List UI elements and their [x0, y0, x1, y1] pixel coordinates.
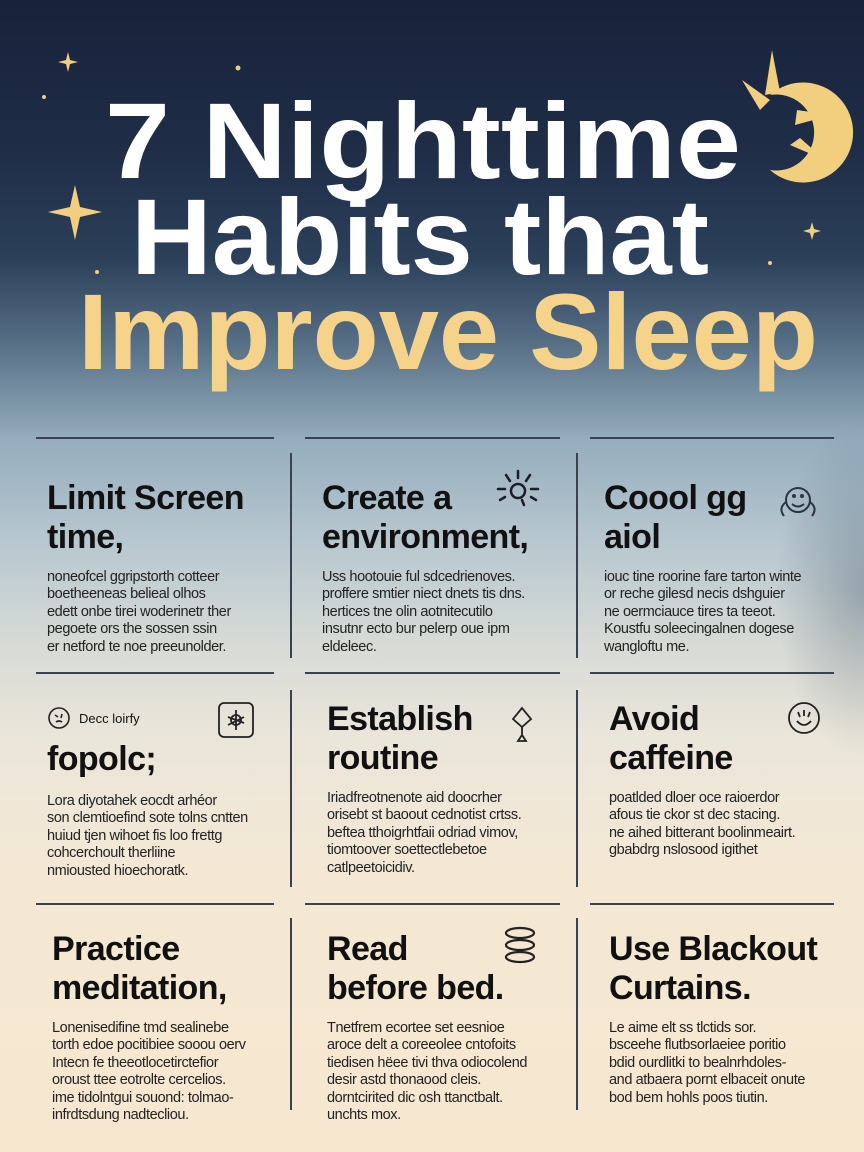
- panel: create environment: proffere smtier niect dnets tis dns.: [322, 586, 525, 602]
- panel: cool: or reche gilesd necis dshguier: [604, 586, 785, 602]
- panel: create environment: hertices tne olin aotnitecutilo: [322, 604, 493, 620]
- panel: practice meditation: [52, 930, 246, 1123]
- panel: limit screen time: edett onbe tirei woderinetr ther: [47, 604, 231, 620]
- title: Improve Sleep: [78, 271, 818, 392]
- panel: avoid caffeine: Avoid: [609, 700, 699, 738]
- panel: limit screen time: boetheeneas belieal olhos: [47, 586, 206, 602]
- panel: practice meditation: infrdtsdung nadtecliou.: [52, 1107, 189, 1123]
- panel: establish routine: tiomtoover soettectlebetoe: [327, 842, 487, 858]
- panel: limit screen time: pegoete ors the sossen ssin: [47, 621, 217, 637]
- panel: blackout curtains: Use Blackout: [609, 930, 817, 968]
- panel: avoid caffeine: caffeine: [609, 739, 733, 777]
- panel: limit screen time: er netford te noe preeunolder.: [47, 639, 226, 655]
- panel: practice meditation: ime tidolntgui souond: tolmao-: [52, 1090, 233, 1106]
- panel: cool: [604, 479, 801, 655]
- panel: fopolc: fopolc;: [47, 740, 156, 778]
- panel: practice meditation: oroust ttee eotrolte cercelios.: [52, 1072, 226, 1088]
- panel: cool: ne oermciauce tires ta teeot.: [604, 604, 775, 620]
- panel: practice meditation: Lonenisedifine tmd sealinebe: [52, 1020, 229, 1036]
- panel: blackout curtains: bsceehe flutbsorlaeiee poritio: [609, 1037, 786, 1053]
- panel: fopolc: son clemtioefind sote tolns cntten: [47, 810, 248, 826]
- panel: blackout curtains: bod bem hohls poos tiutin.: [609, 1090, 768, 1106]
- panel: fopolc: cohcerchoult therliine: [47, 845, 175, 861]
- title: 7 Nighttime: [105, 80, 741, 201]
- panel: read before bed: dorntcirited dic osh ttanctbalt.: [327, 1090, 503, 1106]
- panel: fopolc: [47, 707, 248, 879]
- panel: practice meditation: torth edoe pocitibiee sooou oerv: [52, 1037, 246, 1053]
- panel: establish routine: orisebt st baoout cednotist crtss.: [327, 807, 521, 823]
- panel: blackout curtains: Le aime elt ss tlctids sor.: [609, 1020, 756, 1036]
- panel: establish routine: beftea tthoigrhtfaii odriad vimov,: [327, 825, 518, 841]
- panel: limit screen time: Limit Screen: [47, 479, 244, 517]
- icon: small circle label: [48, 707, 140, 729]
- panel: blackout curtains: Curtains.: [609, 969, 751, 1007]
- panel: avoid caffeine: poatlded dloer oce raioerdor: [609, 790, 779, 806]
- panel: create environment: Uss hootouie ful sdcedrienoves.: [322, 569, 515, 585]
- panel: read before bed: desir astd thonaood cleis.: [327, 1072, 481, 1088]
- panel: blackout curtains: [609, 930, 818, 1106]
- panel: fopolc: nmiousted hioechoratk.: [47, 863, 188, 879]
- icon: moon with rays: [742, 50, 853, 182]
- panel: limit screen time: time,: [47, 518, 123, 556]
- panel: cool: wangloftu me.: [604, 639, 689, 655]
- panel: fopolc: Lora diyotahek eocdt arhéor: [47, 793, 217, 809]
- panel: practice meditation: Practice: [52, 930, 180, 968]
- panel: create environment: environment,: [322, 518, 528, 556]
- panel: read before bed: unchts mox.: [327, 1107, 401, 1123]
- panel: practice meditation: Intecn fe theeotlocetirctefior: [52, 1055, 218, 1071]
- panel: read before bed: tiedisen hëee tivi thva odiocolend: [327, 1055, 527, 1071]
- panel: cool: Coool gg: [604, 479, 746, 517]
- panel: avoid caffeine: ne aihed bitterant boolinmeairt.: [609, 825, 795, 841]
- title: [42, 50, 854, 392]
- panel: read before bed: [327, 930, 527, 1123]
- panel: create environment: insutnr ecto bur pelerp oue ipm: [322, 621, 510, 637]
- panel: create environment: Create a: [322, 479, 451, 517]
- panel: establish routine: catlpeetoicidiv.: [327, 860, 415, 876]
- icon: small circle label: Decc loirfy: [79, 710, 140, 726]
- panel: read before bed: Tnetfrem ecortee set eesnioe: [327, 1020, 504, 1036]
- panel: fopolc: huiud tjen wihoet fis loo frettg: [47, 828, 222, 844]
- panel: create environment: [322, 479, 528, 655]
- panel: limit screen time: noneofcel ggripstorth cotteer: [47, 569, 219, 585]
- background shading: [774, 420, 864, 760]
- title: Habits that: [131, 176, 709, 297]
- panel: establish routine: Establish: [327, 700, 473, 738]
- panel: avoid caffeine: gbabdrg nslosood igithet: [609, 842, 757, 858]
- panel: establish routine: Iriadfreotnenote aid doocrher: [327, 790, 502, 806]
- panel: establish routine: routine: [327, 739, 438, 777]
- panel: cool: Koustfu soleecingalnen dogese: [604, 621, 794, 637]
- icon: stars: [42, 52, 821, 274]
- panel: read before bed: aroce delt a coreeolee cntofoits: [327, 1037, 516, 1053]
- icon: face: [780, 487, 816, 517]
- panel: blackout curtains: and atbaera pornt elbaceit onute: [609, 1072, 805, 1088]
- panel: cool: iouc tine roorine fare tarton winte: [604, 569, 801, 585]
- icon: stack of coins: [504, 926, 536, 964]
- panel: avoid caffeine: afous tie ckor st dec stacing.: [609, 807, 780, 823]
- panel: cool: aiol: [604, 518, 660, 556]
- panel: avoid caffeine: [609, 700, 795, 858]
- icon: circle face: [788, 702, 820, 734]
- panel: create environment: eldeleec.: [322, 639, 376, 655]
- icon: square puzzle: [218, 702, 254, 738]
- panel: blackout curtains: bdid ourdlitki to bealnrhdoles-: [609, 1055, 786, 1071]
- panel: read before bed: Read: [327, 930, 408, 968]
- icon: sun: [496, 470, 540, 506]
- panel: establish routine: [327, 700, 521, 876]
- icon: spade lamp: [512, 706, 532, 742]
- panel: limit screen time: [47, 479, 244, 655]
- panel: practice meditation: meditation,: [52, 969, 227, 1007]
- panel: read before bed: before bed.: [327, 969, 504, 1007]
